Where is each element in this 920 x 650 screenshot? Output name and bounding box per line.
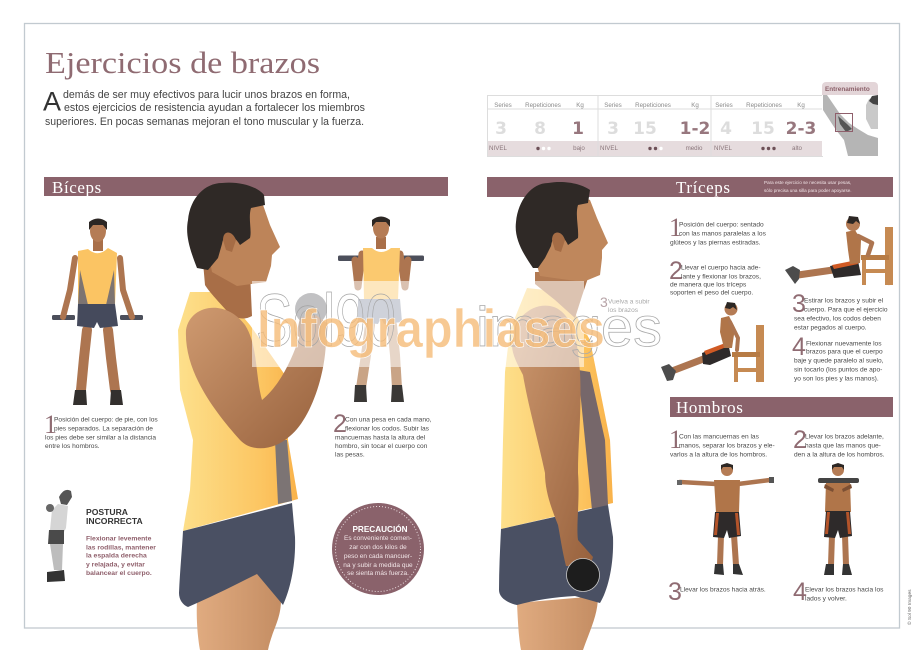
callout: postura incorrecta: y relajada, y evitar <box>86 562 145 568</box>
callout: precaución <box>332 503 424 595</box>
text: hombros steps 3-4: 4 <box>793 578 807 606</box>
text: bíceps step 1: pies separados. La separación de <box>54 426 153 432</box>
text: tríceps steps 3-4: cuerpo. Para que el ejercicio <box>804 306 888 314</box>
training table: 3 <box>495 119 507 139</box>
training table: NIVEL <box>489 145 507 152</box>
text: hombros steps 3-4 <box>668 578 884 606</box>
text: hombros steps 1-2: Llevar los brazos adelante, <box>805 434 884 440</box>
intro text: superiores. En pocas semanas mejoran el tono muscular y la fuerza. <box>45 116 364 128</box>
text: tríceps steps 1-2: soporten el peso del cuerpo. <box>670 290 753 296</box>
intro text: demás de ser muy efectivos para lucir unos brazos en forma, <box>63 89 350 101</box>
text: tríceps steps 3-4: 4 <box>792 333 806 361</box>
text: tríceps steps 3-4: 3 <box>792 290 806 318</box>
watermark <box>252 279 662 367</box>
faded step text behind watermark <box>600 294 650 314</box>
text: tríceps steps 1-2: glúteos y las piernas estiradas. <box>670 240 761 246</box>
watermark: Sol90 <box>256 279 396 362</box>
watermark: images <box>476 295 662 358</box>
text: hombros steps 1-2: manos, separar los brazos y ele- <box>679 442 775 450</box>
text: hombros steps 1-2: Con las mancuernas en las <box>679 434 760 440</box>
training table: medio <box>686 145 703 152</box>
text: bíceps step 2: hombro, sin tocar el cuerpo con <box>335 443 428 450</box>
heading: Hombros: Hombros <box>676 398 743 417</box>
training table: Series <box>494 102 512 109</box>
figure: tríceps main athlete <box>499 182 613 650</box>
text: bíceps step 1 <box>44 410 158 450</box>
title: Ejercicios de brazos <box>45 45 320 80</box>
figure: incorrect posture <box>46 490 72 582</box>
figure: bíceps step 1 <box>52 218 143 405</box>
training table: Kg <box>691 102 699 109</box>
text: hombros steps 3-4: Llevar los brazos hacia atrás. <box>680 586 766 594</box>
text: tríceps steps 3-4: estar pegados al cuerpo. <box>794 324 867 332</box>
figure: tríceps dip position 2 <box>661 302 764 382</box>
heading: Tríceps: sólo precisa una silla para poder apoyarse. <box>764 188 852 193</box>
text: hombros steps 1-2: 2 <box>793 426 807 454</box>
training table: NIVEL <box>600 145 618 152</box>
intro text <box>43 86 365 128</box>
entrenamiento thumbnail <box>822 82 878 156</box>
callout: precaución: na y subir a medida que <box>343 562 413 569</box>
text: bíceps step 2: 2 <box>333 410 347 438</box>
training table: Series <box>604 102 622 109</box>
training table: Kg <box>576 102 584 109</box>
text: tríceps steps 1-2: con las manos paralelas a los <box>679 230 767 238</box>
text: hombros steps 1-2: hasta que las manos que- <box>805 442 881 450</box>
text: tríceps steps 1-2: lante y flexionar los brazos, <box>681 274 761 280</box>
faded step text behind watermark: los brazos <box>608 307 639 314</box>
training table: 1 <box>572 119 584 139</box>
heading: Tríceps <box>487 177 893 197</box>
text: hombros steps 1-2: 1 <box>669 425 682 454</box>
text: hombros steps 1-2: varlos a la altura de los hombros. <box>670 452 767 458</box>
training table: 2-3 <box>786 119 816 139</box>
text: tríceps steps 1-2: Posición del cuerpo: sentado <box>679 222 764 228</box>
heading: Tríceps: Para este ejercicio se necesita usar pesas, <box>764 180 851 185</box>
faded step text behind watermark: Vuelva a subir <box>608 298 650 306</box>
text: tríceps steps 1-2: de manera que los tríceps <box>670 282 747 288</box>
training table: 1-2 <box>680 119 710 139</box>
callout: precaución: se sienta más fuerza. <box>347 570 409 577</box>
text: hombros steps 1-2 <box>669 425 885 458</box>
figure: shoulders raise forward <box>818 463 859 575</box>
text: bíceps step 1: 1 <box>44 410 57 439</box>
text: tríceps steps 1-2: Llevar el cuerpo hacia ade- <box>681 264 761 272</box>
intro text: A <box>43 86 61 116</box>
figure: tríceps seated position 1 <box>785 216 893 285</box>
text: tríceps steps 3-4: Flexionar nuevamente los <box>806 340 882 348</box>
heading: Tríceps: Tríceps <box>676 178 731 197</box>
figure: bíceps main athlete <box>178 183 328 650</box>
callout: postura incorrecta: balancear el cuerpo. <box>86 570 152 577</box>
text: tríceps steps 3-4: sin tocarlo (los puntos de apo- <box>794 366 882 374</box>
text: tríceps steps 3-4 <box>792 290 888 382</box>
training table: 3 <box>607 119 619 139</box>
faded step text behind watermark: 3 <box>600 294 608 310</box>
text: bíceps step 1: entre los hombros. <box>45 443 100 450</box>
callout: postura incorrecta: POSTURA <box>86 507 128 517</box>
training table: 4 <box>720 119 732 139</box>
callout: precaución: zar con dos kilos de <box>349 544 407 551</box>
heading: Hombros <box>670 397 893 417</box>
text: tríceps steps 1-2: 2 <box>669 257 683 285</box>
callout: precaución: Es conveniente comen- <box>344 535 412 542</box>
training table: alto <box>792 145 803 152</box>
text: tríceps steps 3-4: sea efectivo, los codos deben <box>794 316 881 322</box>
training table: Repeticiones <box>746 102 782 109</box>
text: tríceps steps 3-4: yo son los pies y las manos). <box>794 376 879 382</box>
text: bíceps step 2: mancuernas hasta la altura del <box>335 434 426 442</box>
callout: precaución: PRECAUCIÓN <box>352 523 408 534</box>
training table: NIVEL <box>714 145 732 152</box>
text: tríceps steps 1-2 <box>669 213 767 296</box>
text: tríceps steps 3-4: brazos para que el cuerpo <box>806 348 883 356</box>
training table: Repeticiones <box>525 102 561 109</box>
training table: Series <box>715 102 733 109</box>
text: tríceps steps 1-2: 1 <box>669 213 682 242</box>
text: bíceps step 2: flexionar los codos. Subir las <box>345 426 430 432</box>
text: bíceps step 1: Posición del cuerpo: de pie, con los <box>54 416 158 424</box>
heading: Bíceps: Bíceps <box>52 178 102 197</box>
training table: Repeticiones <box>635 102 671 109</box>
text: bíceps step 1: los pies debe ser similar a la distancia <box>45 434 156 442</box>
training table: 15 <box>633 119 657 139</box>
training table: bajo <box>573 145 585 152</box>
callout: postura incorrecta: las rodillas, mantener <box>86 544 156 552</box>
callout: precaución: peso en cada mancuer- <box>344 553 412 560</box>
entrenamiento thumbnail: Entrenamiento <box>825 86 870 93</box>
callout: postura incorrecta <box>86 507 156 577</box>
credit: © Sol 90 Images <box>906 589 913 625</box>
figure: shoulders raise sideways <box>677 463 774 575</box>
figure: bíceps step 2 <box>338 216 424 402</box>
text: tríceps steps 3-4: baje y quede paralelo al suelo, <box>794 358 884 364</box>
text: hombros steps 3-4: lados y volver. <box>805 596 847 602</box>
heading: Bíceps <box>44 177 448 197</box>
text: hombros steps 3-4: 3 <box>668 578 682 606</box>
training table <box>488 95 822 156</box>
callout: postura incorrecta: Flexionar levemente <box>86 536 152 542</box>
text: hombros steps 1-2: den a la altura de los hombros. <box>794 452 885 458</box>
training table: 15 <box>751 119 775 139</box>
training table: Kg <box>797 102 805 109</box>
text: bíceps step 2: Con una pesa en cada mano, <box>345 416 432 424</box>
callout: postura incorrecta: INCORRECTA <box>86 516 143 526</box>
text: bíceps step 2 <box>333 410 432 458</box>
callout: postura incorrecta: la espalda derecha <box>86 552 147 560</box>
text: hombros steps 3-4: Elevar los brazos hacia los <box>805 586 884 594</box>
intro text: estos ejercicios de resistencia ayudan a fortalecer los miembros <box>64 102 365 114</box>
text: tríceps steps 3-4: Estirar los brazos y subir el <box>804 298 884 304</box>
training table: 8 <box>534 119 546 139</box>
text: bíceps step 2: las pesas. <box>335 452 365 458</box>
watermark: Infographiases <box>257 299 605 359</box>
